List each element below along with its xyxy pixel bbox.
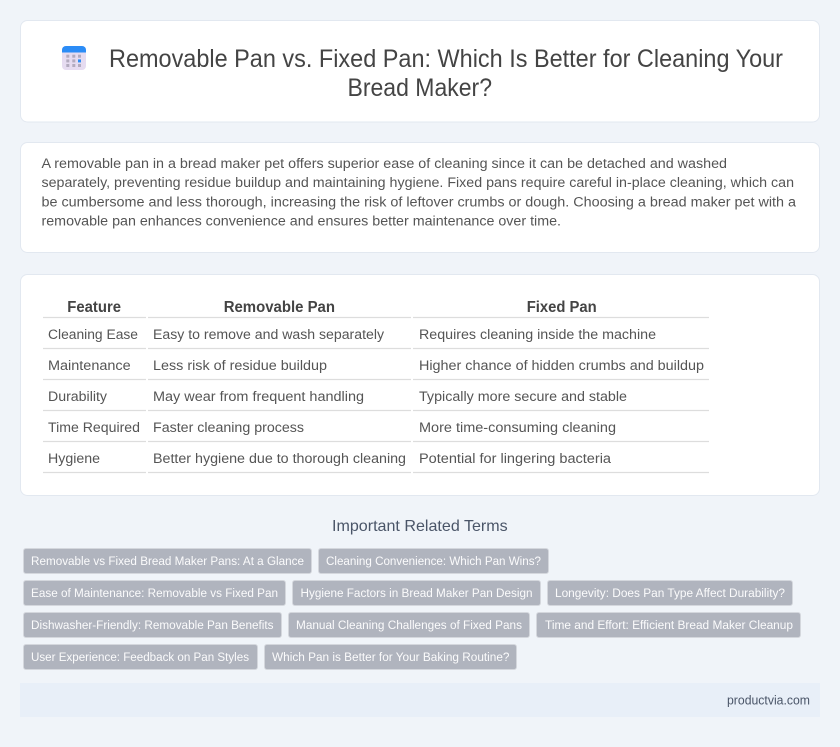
related terms tags (24, 548, 800, 670)
footer (20, 683, 820, 717)
tag (288, 612, 530, 638)
table row: maintenance: Higher chance of hidden crumbs and buildup (419, 358, 704, 374)
table row: maintenance: Less risk of residue buildup (153, 358, 327, 374)
tag (24, 612, 282, 638)
title: Removable Pan vs. Fixed Pan: Which Is Better for Cleaning Your (109, 46, 783, 73)
tag: Hygiene Factors in Bread Maker Pan Design (300, 586, 532, 600)
tag: Longevity: Does Pan Type Affect Durability? (555, 586, 785, 600)
text block: description paragraph: A removable pan in a bread maker pet offers superior ease of cleaning since it can be detached and washed (42, 156, 727, 172)
icon: calendar (62, 46, 86, 70)
table row: time required: Time Required (48, 420, 140, 436)
tag (548, 580, 792, 606)
table row: time required (48, 420, 616, 436)
table row: hygiene (48, 451, 611, 467)
tag: Which Pan is Better for Your Baking Routine? (272, 650, 510, 664)
title (109, 46, 783, 102)
title: Bread Maker? (348, 75, 492, 102)
table header row: Removable Pan (224, 299, 335, 316)
table row: hygiene: Hygiene (48, 451, 100, 467)
tag: Removable vs Fixed Bread Maker Pans: At a Glance (31, 554, 304, 568)
table row: cleaning ease: Easy to remove and wash separately (153, 327, 385, 343)
tag (318, 548, 548, 574)
table row: durability: Typically more secure and stable (419, 389, 627, 405)
table row: maintenance: Maintenance (48, 358, 131, 374)
footer source text: productvia.com (727, 693, 810, 707)
panel: header (20, 20, 820, 122)
table row: cleaning ease (48, 327, 656, 343)
table header row (67, 299, 597, 316)
table row: hygiene: Potential for lingering bacteria (419, 451, 611, 467)
text block: description paragraph: removable pan enhances convenience and ensures better maintenance over time. (42, 214, 561, 230)
tag: Ease of Maintenance: Removable vs Fixed Pan (31, 586, 278, 600)
tag: Dishwasher-Friendly: Removable Pan Benefits (31, 618, 274, 632)
table row: time required: More time-consuming cleaning (419, 420, 616, 436)
panel: description (20, 142, 820, 252)
tag: Cleaning Convenience: Which Pan Wins? (326, 554, 541, 568)
tag (292, 580, 540, 606)
tag (536, 612, 800, 638)
text block: description paragraph: be cumbersome and less thorough, increasing the risk of leftover crumbs or dough. Choosing a bread maker pet with a (42, 194, 796, 210)
tag (24, 580, 286, 606)
table row: cleaning ease: Cleaning Ease (48, 327, 138, 343)
tag (264, 644, 516, 670)
tag: Time and Effort: Efficient Bread Maker Cleanup (545, 618, 793, 632)
table row: cleaning ease: Requires cleaning inside the machine (419, 327, 656, 343)
table row: maintenance (48, 358, 704, 374)
text block: description paragraph: separately, preventing residue buildup and maintaining hygiene. Fixed pans require careful in-place cleaning, which can (42, 175, 794, 191)
table header row: Fixed Pan (527, 299, 597, 316)
tag: User Experience: Feedback on Pan Styles (31, 650, 249, 664)
table header row: Feature (67, 299, 121, 316)
tag (24, 644, 258, 670)
tag (24, 548, 312, 574)
heading: important related terms: Important Related Terms (332, 518, 508, 535)
table row: durability (48, 389, 627, 405)
panel: comparison table (20, 274, 820, 496)
table row: hygiene: Better hygiene due to thorough cleaning (153, 451, 406, 467)
tag: Manual Cleaning Challenges of Fixed Pans (296, 618, 522, 632)
text block: description paragraph (42, 156, 796, 230)
table row: durability: Durability (48, 389, 108, 405)
table row: durability: May wear from frequent handling (153, 389, 364, 405)
table row: time required: Faster cleaning process (153, 420, 304, 436)
